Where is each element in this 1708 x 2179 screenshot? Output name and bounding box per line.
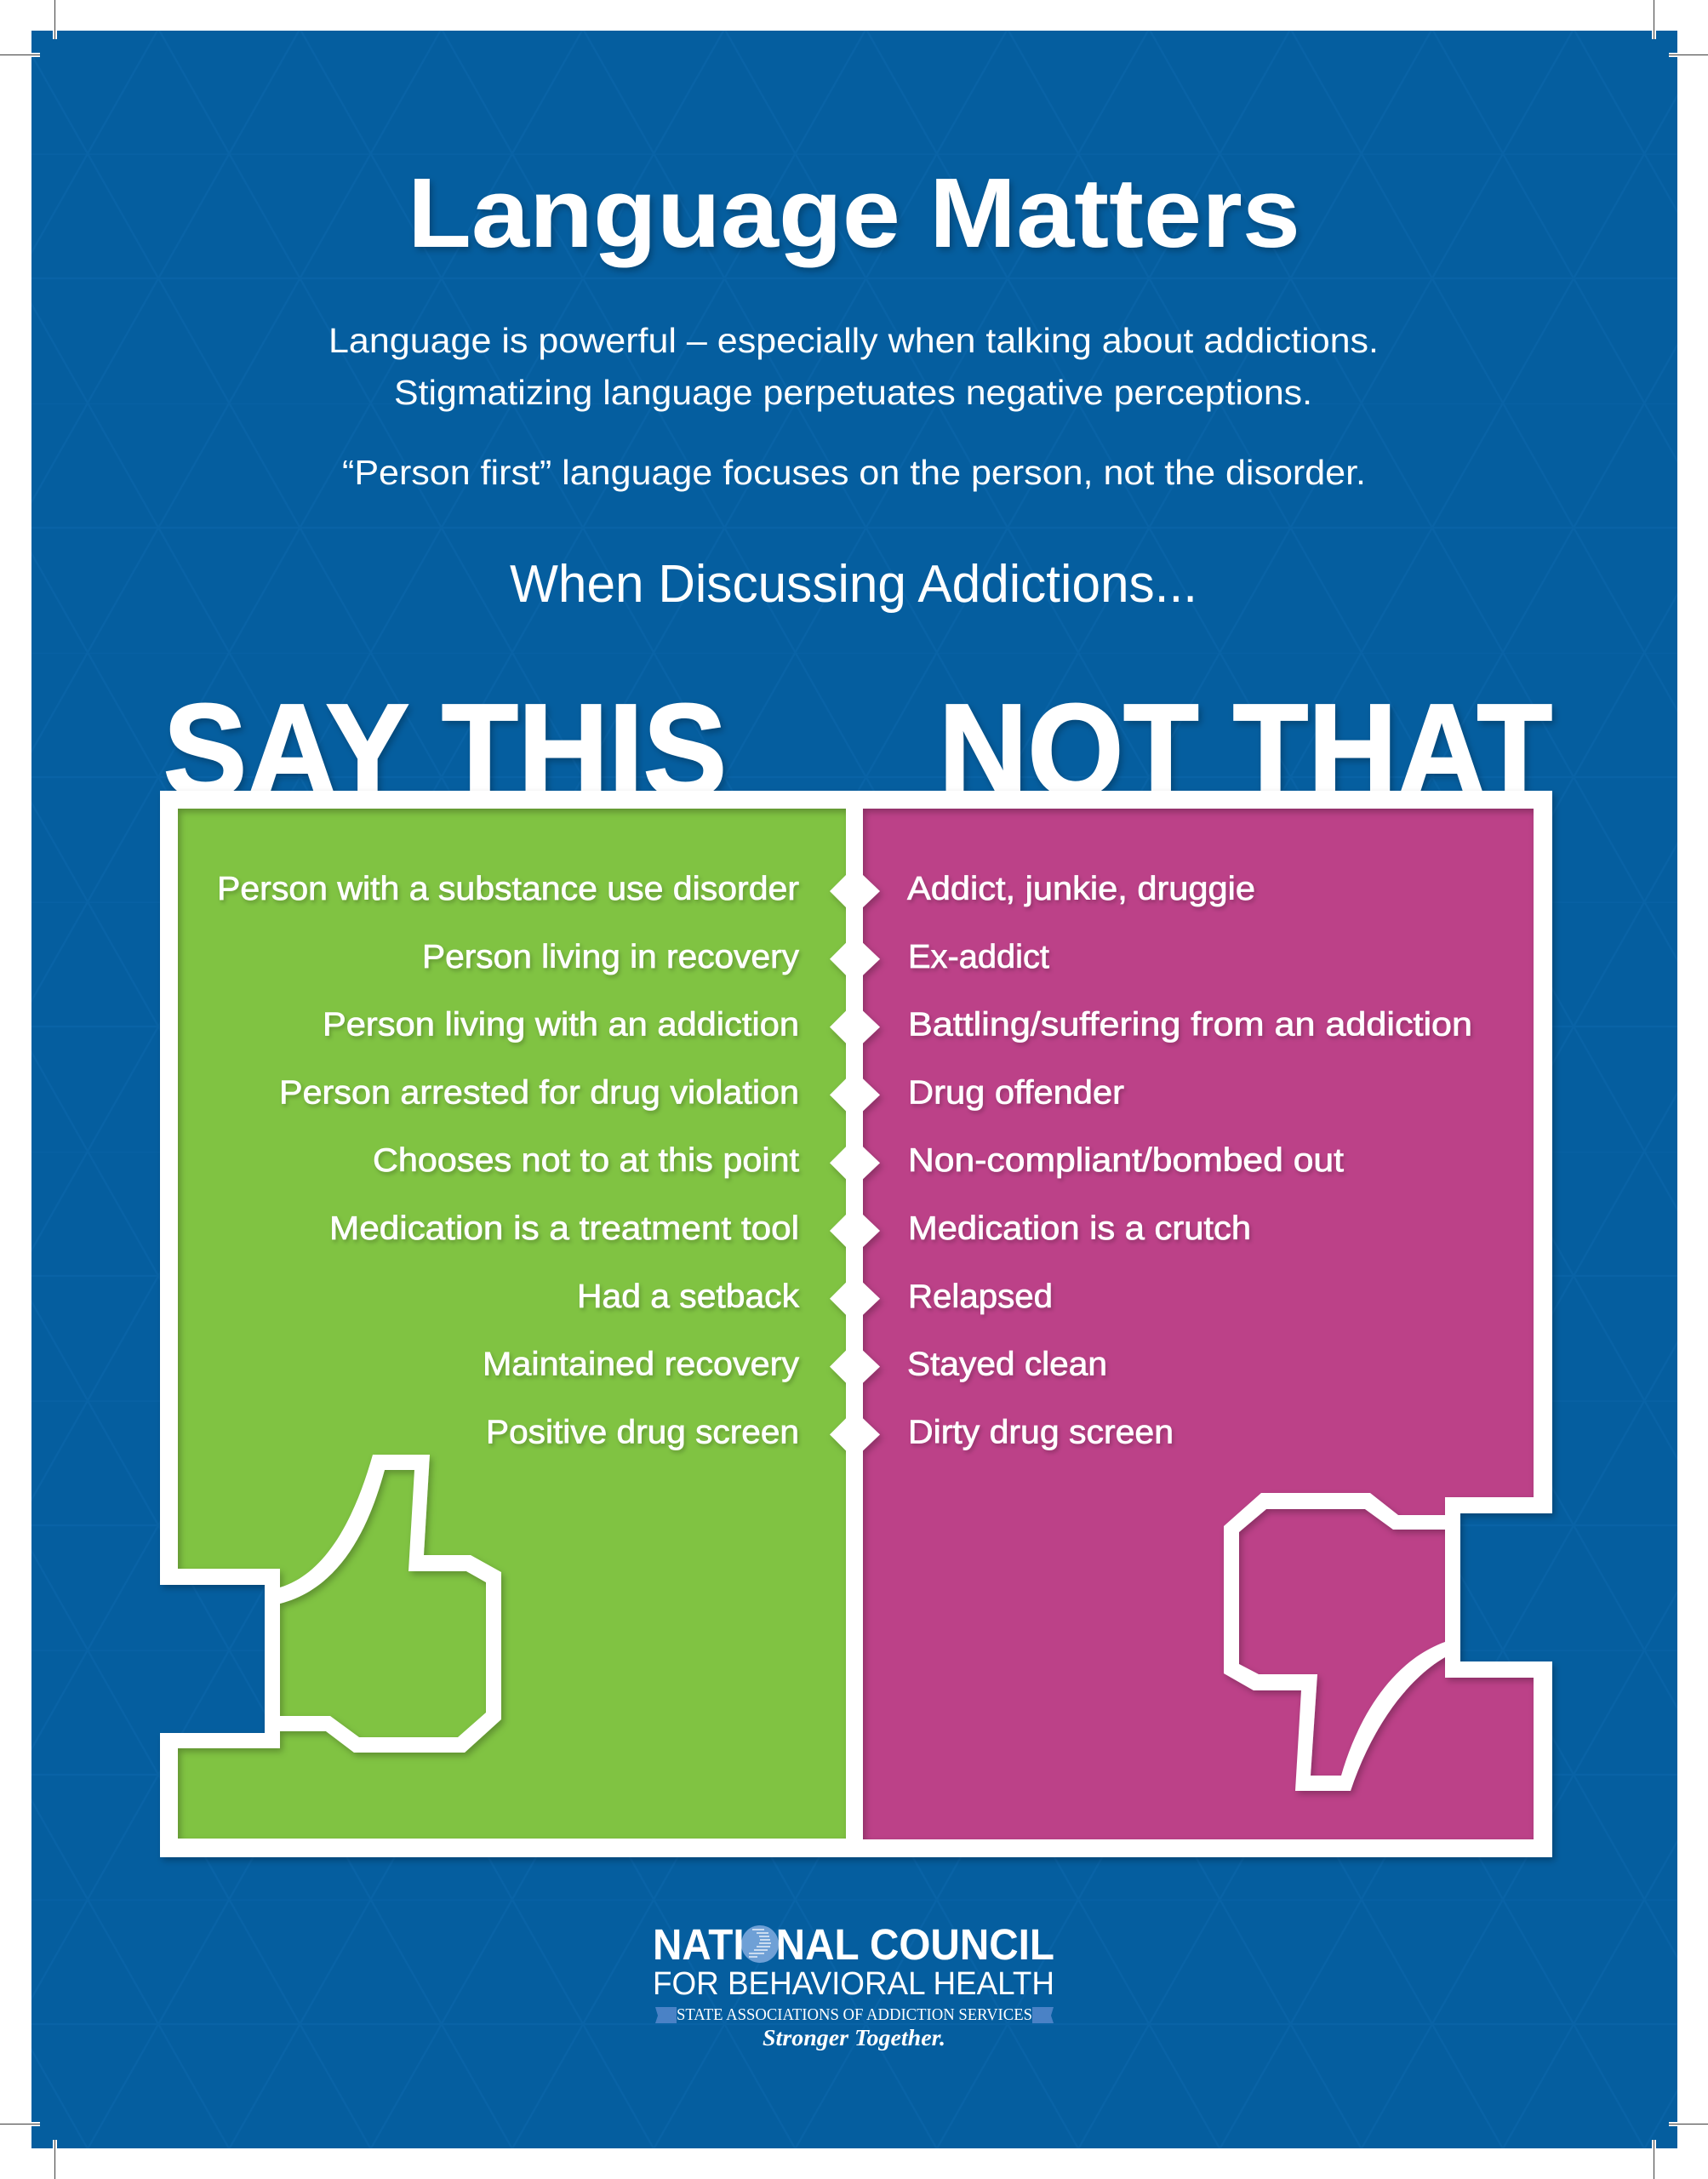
- item: Person living in recovery: [422, 939, 800, 975]
- item: Maintained recovery: [483, 1347, 800, 1383]
- subheading: When Discussing Addictions...: [510, 555, 1197, 614]
- icon: thumbs up: [280, 1455, 501, 1753]
- item: Battling/suffering from an addiction: [908, 1007, 1472, 1044]
- item: Stayed clean: [907, 1347, 1107, 1383]
- item: Ex-addict: [908, 939, 1049, 975]
- heading: say this: SAY THIS: [163, 677, 727, 824]
- item: Person living with an addiction: [323, 1007, 799, 1044]
- white frame, thumbs and row markers: [160, 791, 1552, 1857]
- logo line 2: FOR BEHAVIORAL HEALTH: [653, 1966, 1054, 2002]
- panel: say this green: [178, 809, 846, 1839]
- item: Non-compliant/bombed out: [908, 1142, 1344, 1179]
- intro line 1: Language is powerful – especially when talking about addictions.: [328, 321, 1379, 360]
- list: not that: [907, 871, 1472, 1450]
- intro line 2: Stigmatizing language perpetuates negative perceptions.: [394, 373, 1312, 412]
- item: Addict, junkie, druggie: [907, 871, 1255, 907]
- row markers: diamonds: [830, 875, 880, 1450]
- item: Drug offender: [908, 1074, 1124, 1111]
- item: Positive drug screen: [486, 1414, 799, 1450]
- item: Dirty drug screen: [908, 1414, 1174, 1450]
- icon: thumbs down: [1224, 1493, 1445, 1791]
- logo tagline: Stronger Together.: [763, 2025, 945, 2050]
- item: Person arrested for drug violation: [279, 1074, 799, 1111]
- title: Language Matters: [408, 157, 1300, 268]
- ribbon: [655, 2007, 1054, 2023]
- intro text block: [328, 321, 1379, 492]
- logo line 1: NATIONAL COUNCIL: [653, 1920, 1054, 1969]
- item: Had a setback: [577, 1278, 800, 1315]
- heading: not that: NOT THAT: [939, 677, 1552, 824]
- item: Medication is a treatment tool: [329, 1210, 799, 1247]
- item: Relapsed: [908, 1278, 1053, 1315]
- frame: [160, 791, 1552, 1857]
- item: Chooses not to at this point: [373, 1142, 799, 1179]
- intro line 3: “Person first” language focuses on the person, not the disorder.: [342, 453, 1366, 492]
- list: say this: [217, 871, 800, 1450]
- item: Person with a substance use disorder: [217, 871, 799, 907]
- item: Medication is a crutch: [908, 1210, 1251, 1247]
- logo line 3: STATE ASSOCIATIONS OF ADDICTION SERVICES: [677, 2005, 1032, 2024]
- logo: National Council: [653, 1920, 1054, 2050]
- panel: not that pink: [863, 809, 1534, 1839]
- icon: globe in logo: [741, 1925, 779, 1963]
